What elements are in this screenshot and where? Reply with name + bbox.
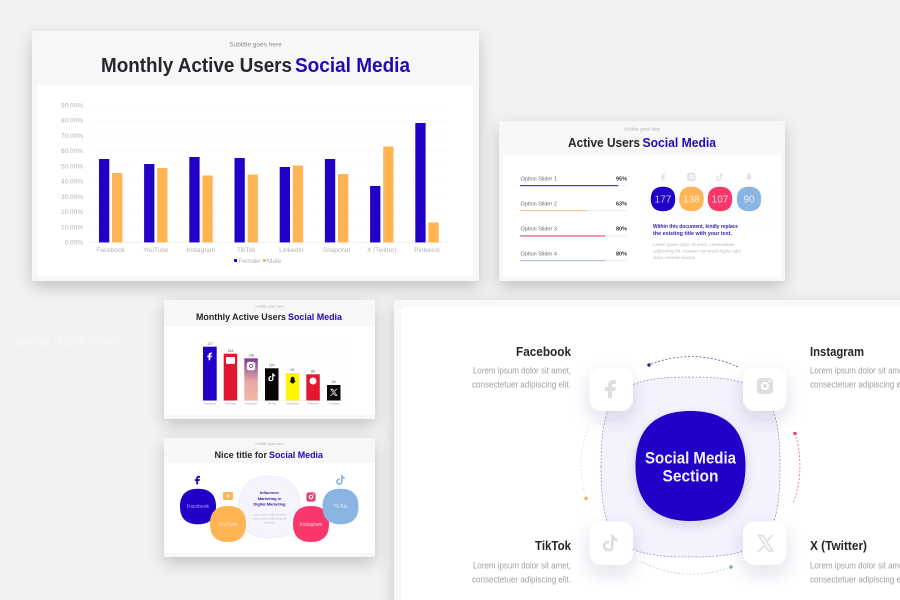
center bubble: Influencer <box>260 490 279 495</box>
bar chart: female and male users: 40.00% <box>61 179 83 186</box>
bubble: TikTok <box>322 489 358 524</box>
text block: Instagram: Instagram <box>810 345 864 359</box>
bar chart: female and male users: 10.00% <box>61 224 83 231</box>
icon: instagram <box>306 492 316 502</box>
bar chart: female and male users: Instagram <box>187 247 215 254</box>
bar chart: female and male users <box>61 102 448 265</box>
bar chart: female and male users: 0.00% <box>65 240 83 247</box>
heading <box>196 312 343 323</box>
text block: Facebook: consectetuer adipiscing elit. <box>472 380 571 390</box>
heading: Social Media <box>295 55 411 77</box>
slider group: Option Slider 1 <box>520 176 557 182</box>
text block: Facebook: Facebook <box>516 345 571 359</box>
center bubble: Digital Marketing <box>253 502 286 506</box>
lavender ring <box>601 377 780 557</box>
value chips: 90 <box>743 194 755 206</box>
heading: Social Media <box>642 135 717 150</box>
icon: youtube <box>223 492 233 500</box>
panel: bar chart by platform <box>164 300 375 419</box>
bar chart: 138 <box>248 354 254 358</box>
callout text: Within this document, kindly replace <box>653 224 738 230</box>
bar chart: 86 <box>311 370 315 374</box>
value chips: 177 <box>655 194 672 206</box>
panel: monthly active users chart <box>32 31 479 281</box>
bubble: YouTube: YouTube <box>218 522 238 528</box>
watermark: www.38sl.com <box>13 333 121 349</box>
body text: adipiscing elit. Aenean commodo ligula eget <box>653 248 742 254</box>
value chips <box>651 187 761 211</box>
center label: Section <box>662 468 718 486</box>
body text <box>653 242 742 260</box>
callout text <box>653 224 738 237</box>
bar chart: female and male users: 60.00% <box>61 148 83 155</box>
bar chart: X (Twitter) <box>327 402 340 406</box>
bar chart: female and male users: YouTube <box>143 247 169 254</box>
bar chart: 177 <box>207 342 213 346</box>
subtitle: Subtitle goes here <box>255 442 284 446</box>
slider group: 63% <box>616 202 627 208</box>
legend: Male <box>267 258 281 265</box>
bar chart: 154 <box>228 349 233 353</box>
panel: influencer marketing <box>164 438 375 557</box>
bar chart: Snapchat <box>287 402 299 406</box>
center label <box>645 450 737 486</box>
bar chart: female and male users: 30.00% <box>61 194 83 201</box>
bar chart: female and male users: Snapchat <box>323 247 351 254</box>
slider group: Option Slider 4 <box>520 252 557 258</box>
callout text: the existing title with your text. <box>653 231 733 237</box>
ring diagram <box>581 357 800 574</box>
bar chart: Facebook <box>204 402 217 406</box>
center bubble: Aenean <box>265 520 275 524</box>
bar chart: female and male users: 70.00% <box>61 133 83 140</box>
bar chart <box>199 340 345 406</box>
text block: TikTok: TikTok <box>535 539 571 553</box>
bar chart: female and male users: Facebook <box>96 247 126 254</box>
value chips: 107 <box>712 194 729 206</box>
bar chart: Pinterest <box>307 402 319 406</box>
center bubble: consectetuer adipiscing elit <box>253 516 287 520</box>
heading: Monthly Active Users <box>101 55 292 77</box>
body text: Lorem ipsum dolor sit amet, consectetuer <box>653 242 735 247</box>
heading: Active Users <box>568 135 640 150</box>
slider group <box>520 176 627 261</box>
center bubble <box>239 476 300 538</box>
bubble: Facebook <box>180 489 216 524</box>
panel: active users sliders <box>499 121 785 281</box>
tile: tiktok <box>590 522 633 565</box>
arc arrow: right <box>793 433 800 504</box>
slider group: 80% <box>616 226 627 232</box>
tile: facebook <box>590 368 633 411</box>
icon row <box>661 173 752 181</box>
bar chart: 90 <box>291 368 294 372</box>
icon: facebook <box>195 476 200 484</box>
center bubble: Marketing in <box>258 496 282 501</box>
arc arrow: top <box>649 357 738 367</box>
bubble: Facebook: Facebook <box>187 504 209 510</box>
bubble: YouTube <box>210 506 246 542</box>
arc arrow: bottom <box>642 562 731 574</box>
text block: Facebook: Lorem ipsum dolor sit amet, <box>473 366 571 376</box>
slider group: Option Slider 2 <box>520 202 557 208</box>
tile: x <box>743 522 786 565</box>
tile: instagram <box>743 368 786 411</box>
bar chart: TikTok <box>268 402 276 406</box>
bar chart: female and male users: 50.00% <box>61 163 83 170</box>
slider group: Option Slider 3 <box>520 226 557 232</box>
value chips: 138 <box>683 194 700 206</box>
body text: dolor. Aenean massa <box>653 255 695 260</box>
subtitle: Subtitle goes here <box>624 126 661 132</box>
legend: Female <box>238 258 261 265</box>
bar chart: female and male users: Pinterest <box>414 247 440 254</box>
bar chart: female and male users: 80.00% <box>61 118 83 125</box>
bubble: TikTok: TikTok <box>333 504 348 510</box>
bar chart: female and male users: X (Twitter) <box>367 247 397 254</box>
text block: TikTok: Lorem ipsum dolor sit amet, <box>473 560 571 572</box>
heading: Social Media <box>269 450 324 461</box>
bar chart: 50 <box>332 380 336 384</box>
center blob <box>636 411 746 521</box>
panel: social media section <box>394 300 900 600</box>
heading: Monthly Active Users <box>196 312 286 323</box>
heading: Social Media <box>288 312 343 323</box>
bar chart: female and male users: LinkedIn <box>279 247 304 254</box>
text block: Instagram <box>810 345 900 390</box>
text block: X (Twitter): X (Twitter) <box>810 539 867 553</box>
slider group: 80% <box>616 252 627 258</box>
text block: TikTok <box>472 539 571 586</box>
bubble: Instagram: Instagram <box>300 522 322 528</box>
heading <box>568 135 717 150</box>
text block: Facebook <box>472 345 571 390</box>
subtitle: Subtitle goes here <box>229 42 282 48</box>
heading <box>101 55 411 77</box>
bar chart: Instagram <box>245 402 258 406</box>
bar chart: female and male users: 90.00% <box>61 102 83 110</box>
center bubble: Lorem ipsum dolor sit amet <box>253 512 287 516</box>
bar chart: female and male users: 20.00% <box>61 209 83 216</box>
bar chart: 107 <box>269 364 275 368</box>
heading: Nice title for <box>214 450 267 461</box>
bubble: Instagram <box>293 506 329 542</box>
text block: X (Twitter) <box>810 539 900 586</box>
slider group: 95% <box>616 176 627 182</box>
subtitle: Subtitle goes here <box>255 304 284 308</box>
center label: Social Media <box>645 450 737 468</box>
arc arrow: left <box>581 428 588 498</box>
bar chart: YouTube <box>225 402 236 406</box>
legend <box>234 258 281 265</box>
bar chart: female and male users: TikTok <box>237 247 256 254</box>
text block: TikTok: consectetuer adipiscing elit. <box>472 574 571 586</box>
icon: tiktok <box>336 475 345 485</box>
heading <box>214 450 324 461</box>
